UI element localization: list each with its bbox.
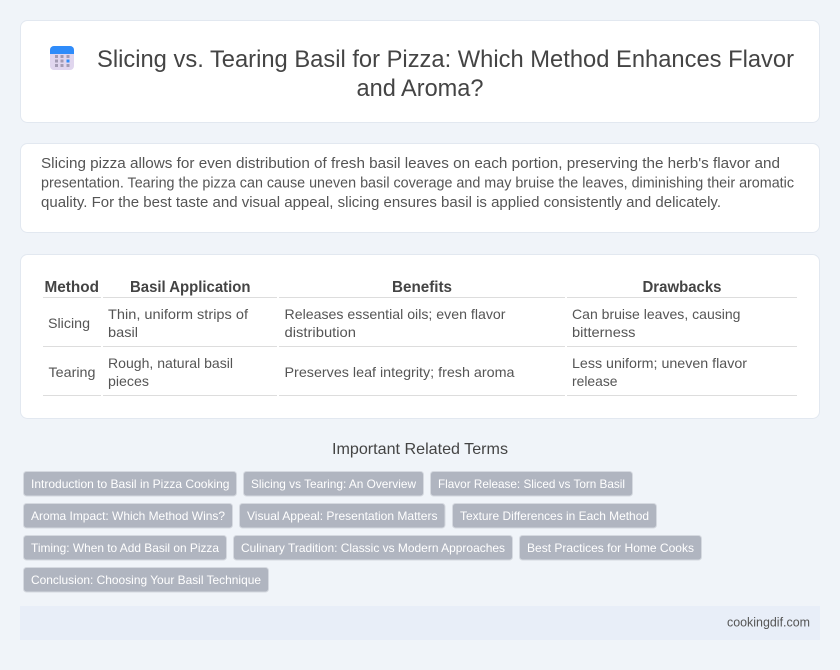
tag: Slicing vs Tearing: An Overview: [251, 477, 416, 491]
tag: [24, 504, 232, 528]
tag: Visual Appeal: Presentation Matters: [247, 509, 438, 523]
table row: slicing: Can bruise leaves, causing: [572, 306, 740, 322]
title: [97, 46, 794, 102]
tag: [24, 568, 268, 592]
heading: important related terms: Important Related Terms: [332, 441, 508, 458]
table row: slicing: Releases essential oils; even flavor: [284, 306, 506, 322]
table row: slicing: [48, 306, 740, 340]
tag: Timing: When to Add Basil on Pizza: [31, 541, 219, 555]
tag: [234, 536, 512, 560]
table row: slicing: bitterness: [572, 324, 636, 340]
tag: Flavor Release: Sliced vs Torn Basil: [438, 477, 625, 491]
tag: [24, 472, 236, 496]
table row: tearing: release: [572, 373, 618, 389]
panel: summary text: quality. For the best taste and visual appeal, slicing ensures basil is applied consistently and delicately.: [41, 195, 721, 211]
table row: tearing: Less uniform; uneven flavor: [572, 355, 747, 371]
tag: Conclusion: Choosing Your Basil Technique: [31, 573, 261, 587]
table row: tearing: Preserves leaf integrity; fresh aroma: [284, 364, 515, 380]
panel: summary text: [20, 144, 820, 232]
table header row: Drawbacks: [642, 279, 722, 296]
table row: tearing: Rough, natural basil: [108, 355, 233, 371]
footer bar: [20, 606, 820, 640]
table row: slicing: Slicing: [48, 315, 90, 331]
related term tags: [24, 472, 702, 592]
title: Slicing vs. Tearing Basil for Pizza: Which Method Enhances Flavor: [97, 46, 794, 73]
title: and Aroma?: [356, 75, 484, 102]
table row: tearing: Tearing: [48, 364, 96, 380]
tag: [520, 536, 702, 560]
tag: [24, 536, 226, 560]
panel: comparison table: [20, 254, 820, 418]
table header row: [44, 279, 722, 296]
table row: slicing: basil: [108, 324, 138, 340]
icon: calendar: [50, 46, 74, 70]
panel: summary text: Slicing pizza allows for even distribution of fresh basil leaves on each portion, preserving the herb's flavor and: [41, 156, 780, 172]
tag: Best Practices for Home Cooks: [527, 541, 694, 555]
panel: header: [20, 20, 820, 122]
tag: [240, 504, 445, 528]
table row: slicing: Thin, uniform strips of: [108, 306, 248, 322]
tag: Aroma Impact: Which Method Wins?: [31, 509, 225, 523]
table header row: Method: [44, 279, 99, 296]
table header row: Benefits: [392, 279, 452, 296]
tag: [452, 504, 656, 528]
footer bar: cookingdif.com: [727, 614, 810, 630]
tag: Introduction to Basil in Pizza Cooking: [31, 477, 229, 491]
panel: summary text: presentation. Tearing the pizza can cause uneven basil coverage and may bruise the leaves, diminishing their aromatic: [41, 176, 794, 192]
table header row: Basil Application: [130, 279, 250, 296]
table row: tearing: pieces: [108, 373, 149, 389]
tag: [430, 472, 632, 496]
tag: Culinary Tradition: Classic vs Modern Approaches: [241, 541, 505, 555]
table row: tearing: [48, 355, 747, 389]
tag: Texture Differences in Each Method: [460, 509, 649, 523]
table row: slicing: distribution: [284, 324, 356, 340]
tag: [244, 472, 424, 496]
